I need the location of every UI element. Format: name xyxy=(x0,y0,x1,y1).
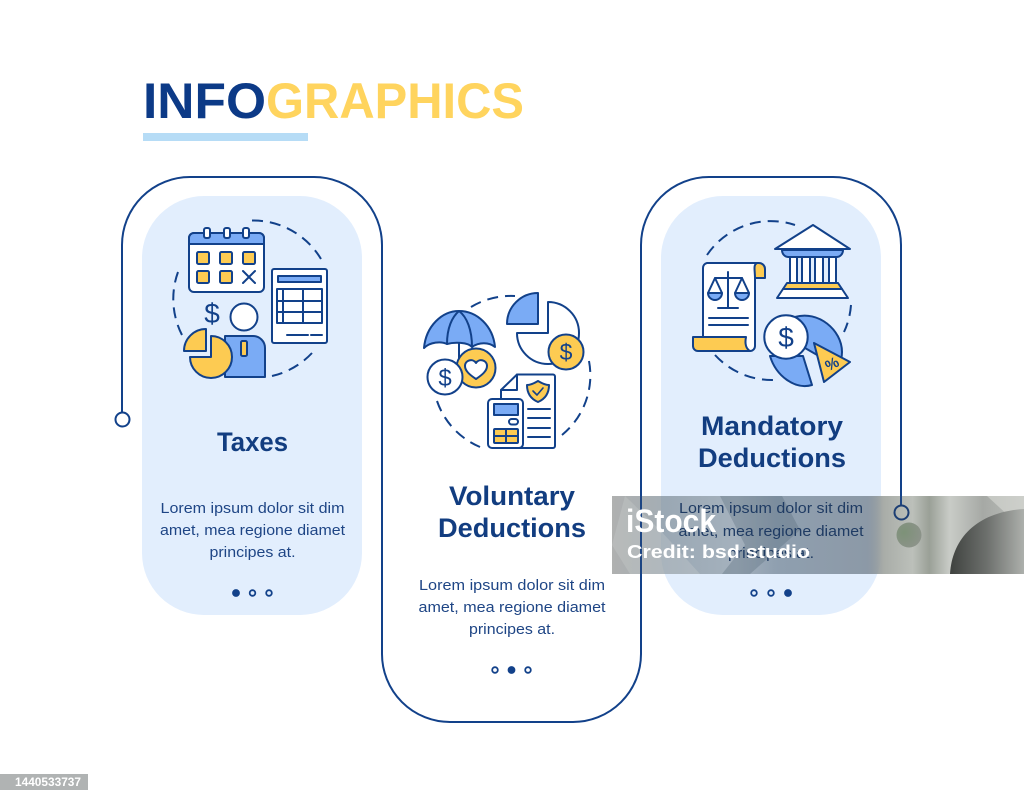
icon: calculator xyxy=(488,399,523,448)
panel: taxes background xyxy=(142,196,362,615)
icon: voluntary deductions xyxy=(424,293,590,448)
text: mandatory deductions body: Lorem ipsum dolor sit dim xyxy=(679,500,863,517)
icon: person xyxy=(225,304,265,377)
text: taxes body: principes at. xyxy=(210,544,296,561)
text: mandatory deductions body xyxy=(678,500,864,562)
outline end node xyxy=(894,506,908,520)
pager dots: mandatory deductions xyxy=(751,590,791,596)
heading: mandatory deductions: Deductions xyxy=(698,443,846,473)
heading: mandatory deductions xyxy=(698,411,846,473)
text: mandatory deductions body: amet, mea regione diamet xyxy=(678,523,864,540)
icon: dollar coin: $ xyxy=(438,365,452,392)
pager dots: voluntary deductions xyxy=(492,667,531,673)
icon: taxes xyxy=(173,220,327,378)
text: voluntary deductions body: Lorem ipsum dolor sit dim xyxy=(419,577,605,594)
icon: insurance document xyxy=(501,374,555,448)
icon: blue pie chart: $ xyxy=(560,339,573,365)
icon: calendar xyxy=(189,228,264,292)
heading: mandatory deductions: Mandatory xyxy=(701,411,843,441)
icon: umbrella xyxy=(424,311,495,358)
watermark background band xyxy=(612,496,1024,574)
icon: blue pie with percent: % xyxy=(822,354,842,375)
icon: blue pie chart xyxy=(507,293,584,370)
watermark text: iStock xyxy=(626,503,716,539)
text: taxes body: Lorem ipsum dolor sit dim xyxy=(160,500,344,517)
icon: legal scroll xyxy=(693,263,765,351)
connecting outline xyxy=(116,177,901,722)
image id tag xyxy=(0,774,88,790)
icon: blue pie with percent: $ xyxy=(778,322,794,353)
icon: dollar sign: $ xyxy=(204,298,220,329)
heading: voluntary deductions: Voluntary xyxy=(449,481,575,511)
title: GRAPHICS xyxy=(266,73,524,129)
icon: tax table xyxy=(272,269,327,343)
icon: blue pie with percent xyxy=(764,315,850,386)
title: INFO xyxy=(143,73,266,129)
heading: voluntary deductions xyxy=(438,481,586,543)
text: voluntary deductions body xyxy=(418,577,606,638)
icon: yellow pie chart xyxy=(184,329,232,378)
pager dots: taxes xyxy=(233,590,272,596)
text: voluntary deductions body: principes at. xyxy=(469,621,555,638)
text: voluntary deductions body: amet, mea regione diamet xyxy=(418,599,606,616)
heading: taxes: Taxes xyxy=(217,427,288,457)
panel: mandatory deductions background xyxy=(661,196,881,615)
icon: heart coin xyxy=(456,348,496,388)
heading: voluntary deductions: Deductions xyxy=(438,513,586,543)
title xyxy=(143,73,524,129)
image id tag: 1440533737 xyxy=(15,775,81,789)
icon: mandatory deductions xyxy=(693,221,851,386)
text: mandatory deductions body: principes at. xyxy=(728,545,814,562)
text: taxes body xyxy=(160,500,346,561)
text: taxes body: amet, mea regione diamet xyxy=(160,522,346,539)
watermark text xyxy=(626,503,810,562)
icon: bank building xyxy=(775,225,850,298)
title underline xyxy=(143,133,308,141)
watermark text: Credit: bsd studio xyxy=(627,542,810,562)
icon: dollar coin xyxy=(428,360,462,394)
